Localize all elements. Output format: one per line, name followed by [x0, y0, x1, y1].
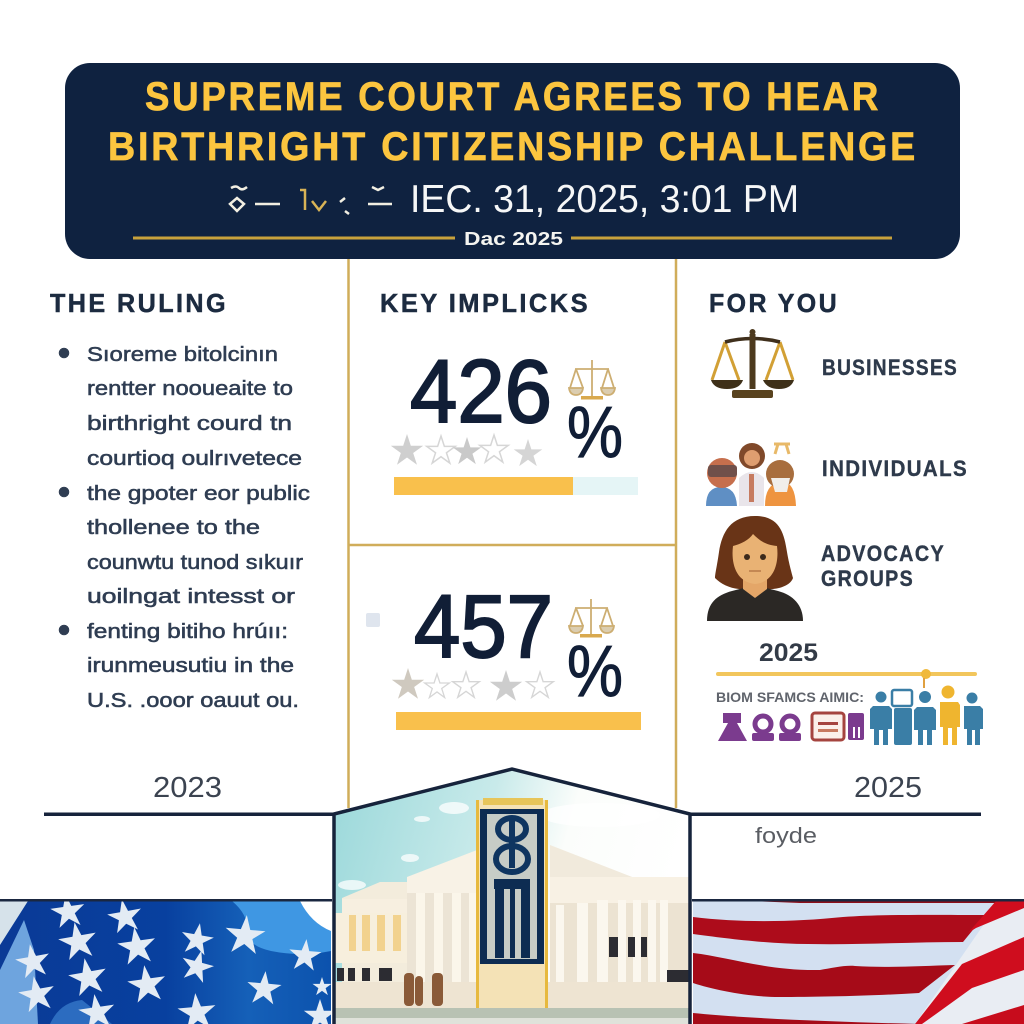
progress bar	[394, 477, 638, 495]
bullet list	[59, 343, 310, 712]
flag border	[0, 899, 332, 902]
label: advocacy groups	[821, 541, 945, 591]
heading: the ruling: THE RULING	[50, 288, 228, 318]
label: advocacy groups: GROUPS	[821, 566, 914, 591]
icon: advocacy person	[707, 516, 803, 621]
stat 426 percent: %	[567, 393, 623, 473]
bullet list: counwtu tunod sıkuır	[87, 551, 303, 574]
panel: the ruling	[50, 288, 310, 712]
heading: for you: FOR YOU	[709, 288, 839, 318]
date line ornament	[230, 186, 392, 214]
stat 457 percent: 457	[414, 576, 553, 676]
bullet list: the gpoter eor public	[87, 482, 310, 505]
mini timeline	[716, 639, 983, 745]
icons: people row	[870, 686, 983, 745]
icon: individuals	[706, 443, 796, 506]
timeline left	[44, 772, 334, 816]
year 2023: 2023	[153, 772, 222, 804]
bullet list: irunmeusutiu in the	[87, 654, 294, 677]
star rating	[391, 434, 542, 466]
heading: key implicks: KEY IMPLICKS	[380, 288, 590, 318]
progress bar	[396, 712, 641, 730]
title: SUPREME COURT AGREES TO HEAR	[145, 75, 881, 119]
stat 457 percent	[366, 576, 641, 730]
panel frame	[334, 769, 690, 1024]
stat 457 percent: %	[567, 632, 623, 712]
star rating	[392, 668, 553, 701]
icons: purple and red row	[718, 713, 864, 741]
timeline right	[690, 772, 981, 848]
header banner	[65, 63, 960, 259]
bullet list: thollenee to the	[87, 516, 260, 539]
label: advocacy groups: ADVOCACY	[821, 541, 945, 566]
year 2025: 2025	[854, 772, 922, 804]
icon: small scales	[569, 599, 614, 638]
flag: stripes	[693, 901, 1024, 1024]
date divider: Dac 2025	[464, 229, 563, 249]
flag: stars	[0, 892, 336, 1024]
column divider lines	[348, 259, 676, 808]
icon: small scales	[569, 360, 615, 400]
caption: BIOM SFAMCS AIMIC:	[716, 689, 864, 705]
icon: scales of justice	[711, 329, 794, 398]
bullet list: uoilngat intesst or	[87, 585, 295, 608]
year label: 2025	[759, 639, 818, 667]
panel: key implicks	[366, 288, 641, 730]
date line: IEC. 31, 2025, 3:01 PM	[410, 178, 799, 221]
stat 426 percent	[391, 341, 638, 495]
gold banner frame	[476, 798, 548, 1008]
caption: foyde	[755, 823, 817, 848]
people	[404, 973, 443, 1006]
date divider	[133, 229, 892, 249]
label: businesses: BUSINESSES	[822, 355, 958, 380]
stat 426 percent: 426	[410, 341, 552, 441]
bullet list: Sıoreme bitolcinın	[87, 343, 278, 366]
banner	[480, 809, 544, 964]
panel: for you	[706, 288, 968, 621]
bullet list: rentter nooueaite to	[87, 377, 293, 400]
bullet list: U.S. .ooor oauut ou.	[87, 689, 299, 712]
label: individuals: INDIVIDUALS	[822, 456, 968, 481]
central court image	[333, 768, 691, 1024]
bullet list: courtioq oulrıvetece	[87, 447, 302, 470]
flag border	[692, 899, 1024, 902]
bullet list: fenting bitiho hrúıı:	[87, 620, 288, 643]
building	[335, 845, 691, 1024]
title	[108, 75, 918, 169]
title: BIRTHRIGHT CITIZENSHIP CHALLENGE	[108, 125, 918, 169]
bullet list: birthright courd tn	[87, 412, 292, 435]
